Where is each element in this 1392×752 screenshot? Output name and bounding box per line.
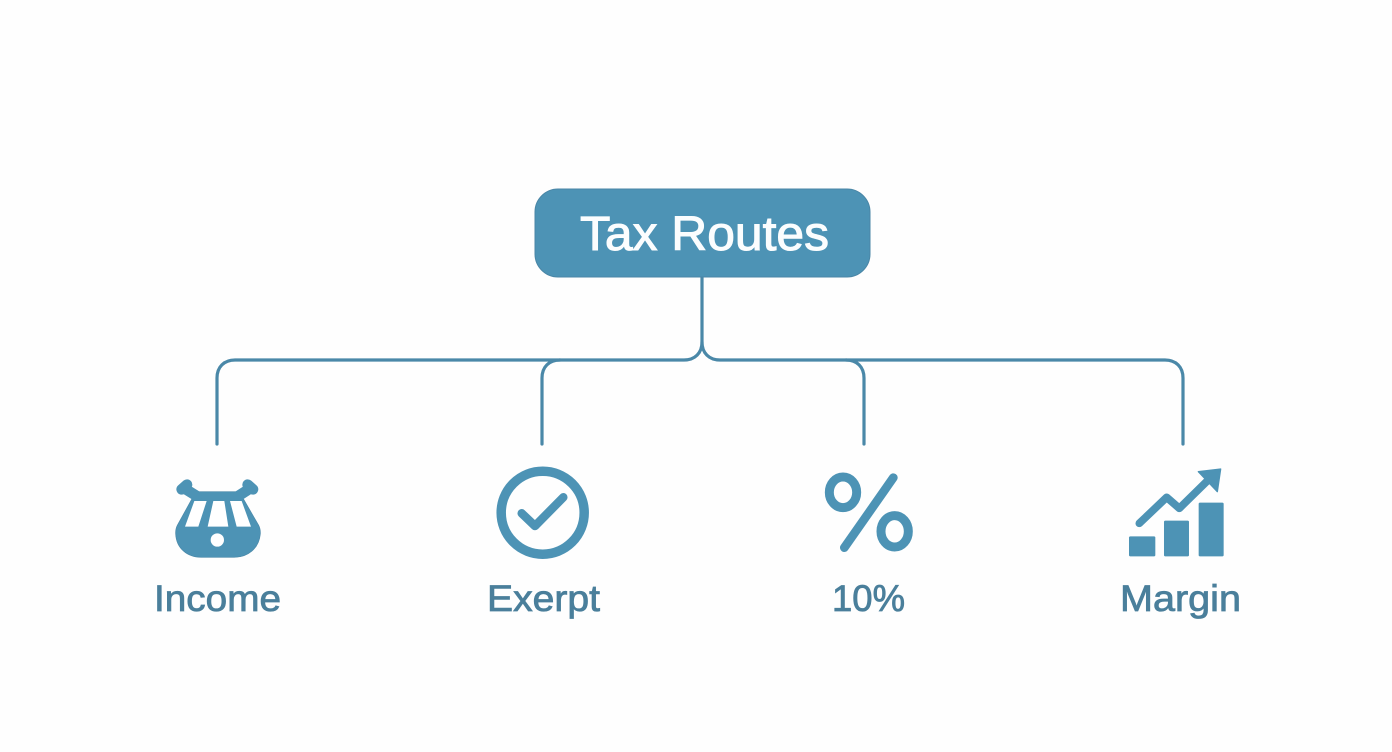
branch: 10% <box>829 477 908 619</box>
root node: Tax Routes <box>535 189 870 277</box>
label: Exerpt: Exerpt <box>487 578 601 619</box>
icon: percent <box>829 477 908 548</box>
branch: Income <box>154 485 281 619</box>
root node label: Tax Routes <box>580 208 829 261</box>
branch: Margin <box>1120 469 1241 619</box>
label: Margin: Margin <box>1120 578 1241 619</box>
icon: check circle <box>501 471 584 554</box>
label: 10%: 10% <box>832 578 905 619</box>
label: Income: Income <box>154 578 281 619</box>
icon: lyre-shaped income <box>176 485 260 557</box>
branch: Exerpt <box>487 471 601 619</box>
icon: rising bar chart with arrow <box>1129 469 1224 556</box>
connector tree <box>217 277 1183 444</box>
